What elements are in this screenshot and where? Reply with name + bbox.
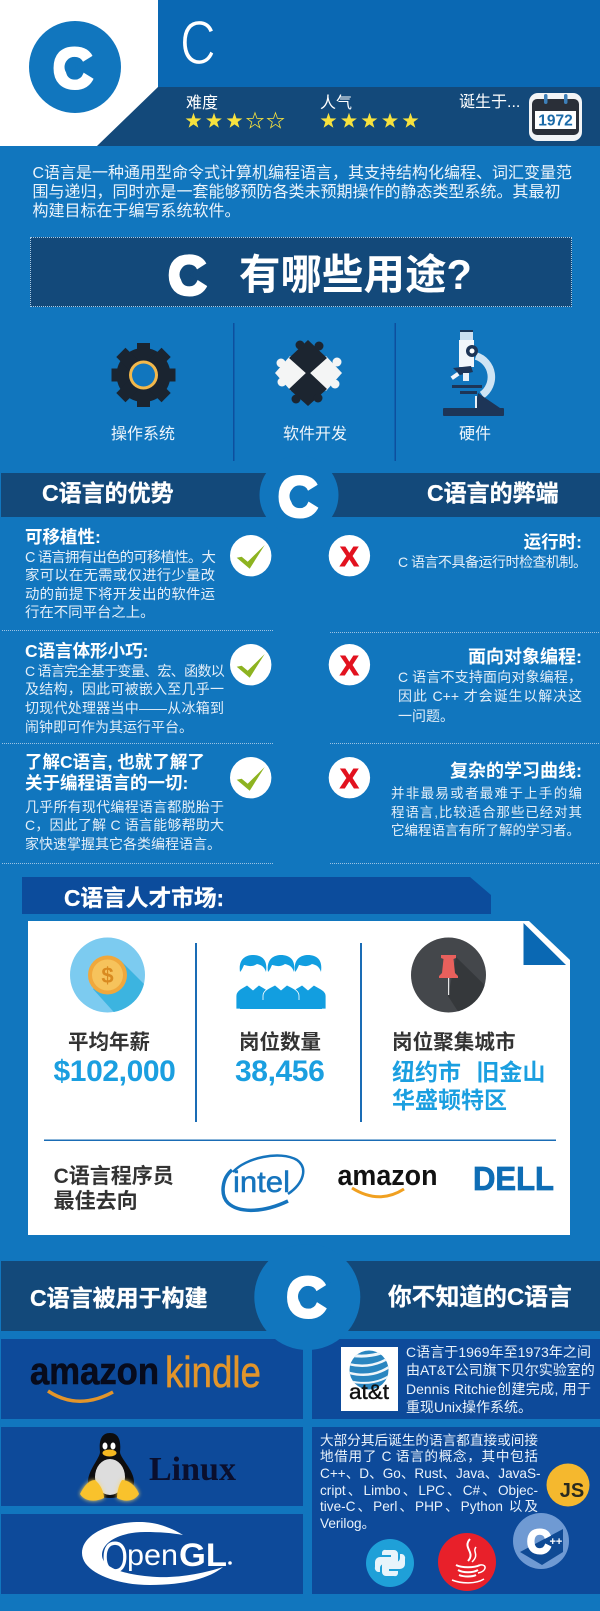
popularity stars (320, 112, 418, 128)
pro 2 text: 闹钟即可作为其运行平台。 (25, 719, 193, 735)
section band: pros and cons (1, 468, 600, 524)
pro 2 heading: C语言体形小巧: (25, 640, 148, 660)
heading: built with: C语言被用于构建 (30, 1285, 208, 1311)
logo: at&t: at&t (349, 1381, 389, 1404)
pro 2 text: C 语言完全基于变量、宏、函数以 (25, 662, 224, 678)
icon: C++ (512, 1512, 570, 1570)
fact 2 text: 大部分其后诞生的语言都直接或间接 (320, 1432, 538, 1448)
logo: intel: intel (233, 1166, 290, 1199)
fact 1 text (406, 1343, 591, 1416)
pro 2 text: 及结构，因此可被嵌入至几乎一 (25, 681, 224, 697)
logo: at&t (341, 1347, 398, 1411)
label: cities: 岗位聚集城市 (392, 1031, 516, 1054)
con 2 text: C 语言不支持面向对象编程， (398, 668, 582, 684)
pro 1 text: 动的前提下将开发出的软件运 (25, 587, 215, 603)
pro 3 heading: 关于编程语言的一切: (25, 772, 188, 792)
logo: OpenGL: O (102, 1533, 128, 1582)
pro 2 text (25, 662, 224, 735)
value: cities (392, 1059, 545, 1113)
section panels: used to build (1, 1339, 303, 1594)
fact 2 text: cript、Limbo、LPC、C#、Objec- (320, 1483, 538, 1498)
pro 1 text: 行在不同平台之上。 (25, 605, 155, 621)
section panels: facts (312, 1339, 600, 1594)
popularity label: 人气 (320, 95, 352, 112)
panel: talent market banner (22, 877, 491, 914)
label: salary: 平均年薪 (68, 1031, 150, 1054)
icon: calendar 1972: 1972 (538, 112, 573, 130)
logo: amazon kindle (25, 1350, 270, 1410)
con 3 text (391, 786, 582, 838)
icon: pin (411, 938, 486, 1012)
icon: JS (545, 1462, 591, 1508)
pro 3 heading: 了解C语言, 也就了解了 (25, 752, 205, 772)
pro 3 text (25, 798, 224, 852)
con 3 text: 它编程语言有所了解的学习者。 (391, 823, 580, 838)
value: cities: 纽约市 旧金山 (392, 1059, 545, 1085)
logo: OpenGL: pen (127, 1539, 178, 1572)
panel backgrounds (312, 1339, 600, 1594)
logo: OpenGL (78, 1518, 238, 1588)
icon: gear (112, 343, 176, 407)
uses: dividers (233, 323, 396, 461)
band background (1, 473, 600, 517)
label: jobs: 岗位数量 (239, 1031, 321, 1054)
icon: cross 1: X (340, 541, 359, 572)
icon: cross 1 (328, 535, 370, 576)
fact 2 text: C++、D、Go、Rust、Java、JavaS- (320, 1466, 541, 1481)
con 3 heading: 复杂的学习曲线: (450, 760, 582, 780)
pro 3 heading (25, 752, 205, 792)
panel: talent market card (28, 921, 570, 1235)
logo: intel (221, 1154, 304, 1212)
value: cities: 华盛顿特区 (392, 1087, 507, 1113)
pro 3 text: 几乎所有现代编程语言都脱胎于 (25, 798, 224, 814)
icon: cross 2 (328, 644, 370, 686)
icon: coin (70, 938, 145, 1012)
icon: cross 2: X (340, 650, 359, 681)
con 2 text (398, 668, 582, 724)
intro paragraph: 构建目标在于编写系统软件。 (32, 202, 241, 220)
intro paragraph: 围与递归，同时亦是一套能够预防各类未预期操作的静态类型系统。其最初 (32, 184, 561, 200)
icon: calendar 1972 (529, 93, 582, 141)
born label: 诞生于... (459, 94, 520, 111)
divider rows (2, 630, 599, 864)
header background shapes (0, 0, 600, 146)
logo: OpenGL: GL (179, 1537, 227, 1573)
heading box: uses (30, 237, 572, 307)
fact 2 text (320, 1432, 538, 1533)
icon: JS: JS (560, 1480, 584, 1502)
con 1 heading: 运行时: (524, 532, 582, 552)
fact 1 text: 由AT&T公司旗下贝尔实验室的 (406, 1362, 595, 1378)
heading: cons: C语言的弊端 (427, 480, 559, 506)
label: best destinations: 最佳去向 (54, 1190, 138, 1213)
icon: cross 3 (328, 757, 370, 798)
icon: cross 3: X (340, 763, 359, 794)
card paper (28, 921, 570, 1235)
con 3 text: 程语言,比较适合那些已经对其 (391, 804, 582, 820)
fact 2 text: 地借用了 C 语言的概念，其中包括 (320, 1449, 538, 1464)
pro 2 text: 切现代处理器当中——从冰箱到 (25, 700, 224, 716)
label: OS: 操作系统 (111, 426, 175, 443)
con 2 text: 因此 C++ 才会诞生以解决这 (398, 688, 582, 704)
pro 1 text: C 语言拥有出色的可移植性。大 (25, 550, 215, 566)
difficulty label: 难度 (186, 95, 218, 112)
section band: built with and facts (0, 1261, 600, 1351)
icon: people (236, 955, 326, 1009)
icon: puzzle (275, 340, 342, 406)
band background (0, 1244, 600, 1351)
label: best destinations (54, 1164, 174, 1213)
fact 1 text: C语言于1969年至1973年之间 (406, 1344, 591, 1360)
header panel (0, 0, 600, 146)
value: jobs: 38,456 (235, 1055, 324, 1088)
logo: C circle: C (53, 36, 94, 100)
pro 3 text: 家快速掌握其它各类编程语言。 (25, 836, 221, 852)
intro paragraph (32, 164, 572, 220)
value: salary: $102,000 (54, 1055, 175, 1088)
fact 2 text: tive-C、Perl、PHP、Python 以及 (320, 1499, 538, 1514)
fact 1 text: 重现Unix操作系统。 (406, 1399, 532, 1415)
icon: check 3 (230, 757, 272, 798)
icon: python (365, 1538, 415, 1588)
pro 3 text: C，因此了解 C 语言能够帮助大 (25, 817, 224, 833)
label: software: 软件开发 (283, 426, 347, 443)
logo: amazon kindle: amazon (30, 1351, 159, 1393)
fact 1 text: Dennis Ritchie创建完成, 用于 (406, 1381, 591, 1397)
label: best destinations: C语言程序员 (54, 1165, 174, 1188)
pro 1 heading: 可移植性: (25, 526, 101, 546)
icon: coin: $ (101, 963, 114, 988)
heading text: 有哪些用途? (239, 251, 472, 298)
banner title: C语言人才市场: (64, 885, 224, 911)
pro 1 text: 家可以在无需或仅进行少量改 (25, 568, 215, 584)
con 2 heading: 面向对象编程: (468, 646, 582, 666)
intro paragraph: C语言是一种通用型命令式计算机编程语言，其支持结构化编程、词汇变量范 (32, 164, 572, 182)
banner shape (22, 877, 491, 914)
fact 2 text: Verilog。 (320, 1516, 375, 1531)
con 1 text: C 语言不具备运行时检查机制。 (398, 554, 586, 570)
heading: pros: C语言的优势 (42, 480, 174, 506)
icon: C++: C (527, 1523, 551, 1560)
con 3 text: 并非最易或者最难于上手的编 (391, 786, 582, 801)
panel backgrounds (1, 1339, 303, 1594)
icon: check 1 (230, 535, 272, 576)
con 2 text: 一问题。 (398, 708, 454, 724)
icon: java (437, 1532, 497, 1592)
difficulty stars (186, 112, 284, 129)
logo: C (277, 1267, 337, 1327)
logo: tux penguin (76, 1428, 144, 1506)
pro 1 text (25, 550, 216, 621)
heading: did you know: 你不知道的C语言 (388, 1284, 572, 1311)
icon: check 2 (230, 644, 272, 686)
icon: C++: ++ (550, 1536, 562, 1548)
logo: C circle (29, 21, 121, 113)
icon: microscope (443, 330, 504, 416)
label: hardware: 硬件 (459, 426, 491, 443)
